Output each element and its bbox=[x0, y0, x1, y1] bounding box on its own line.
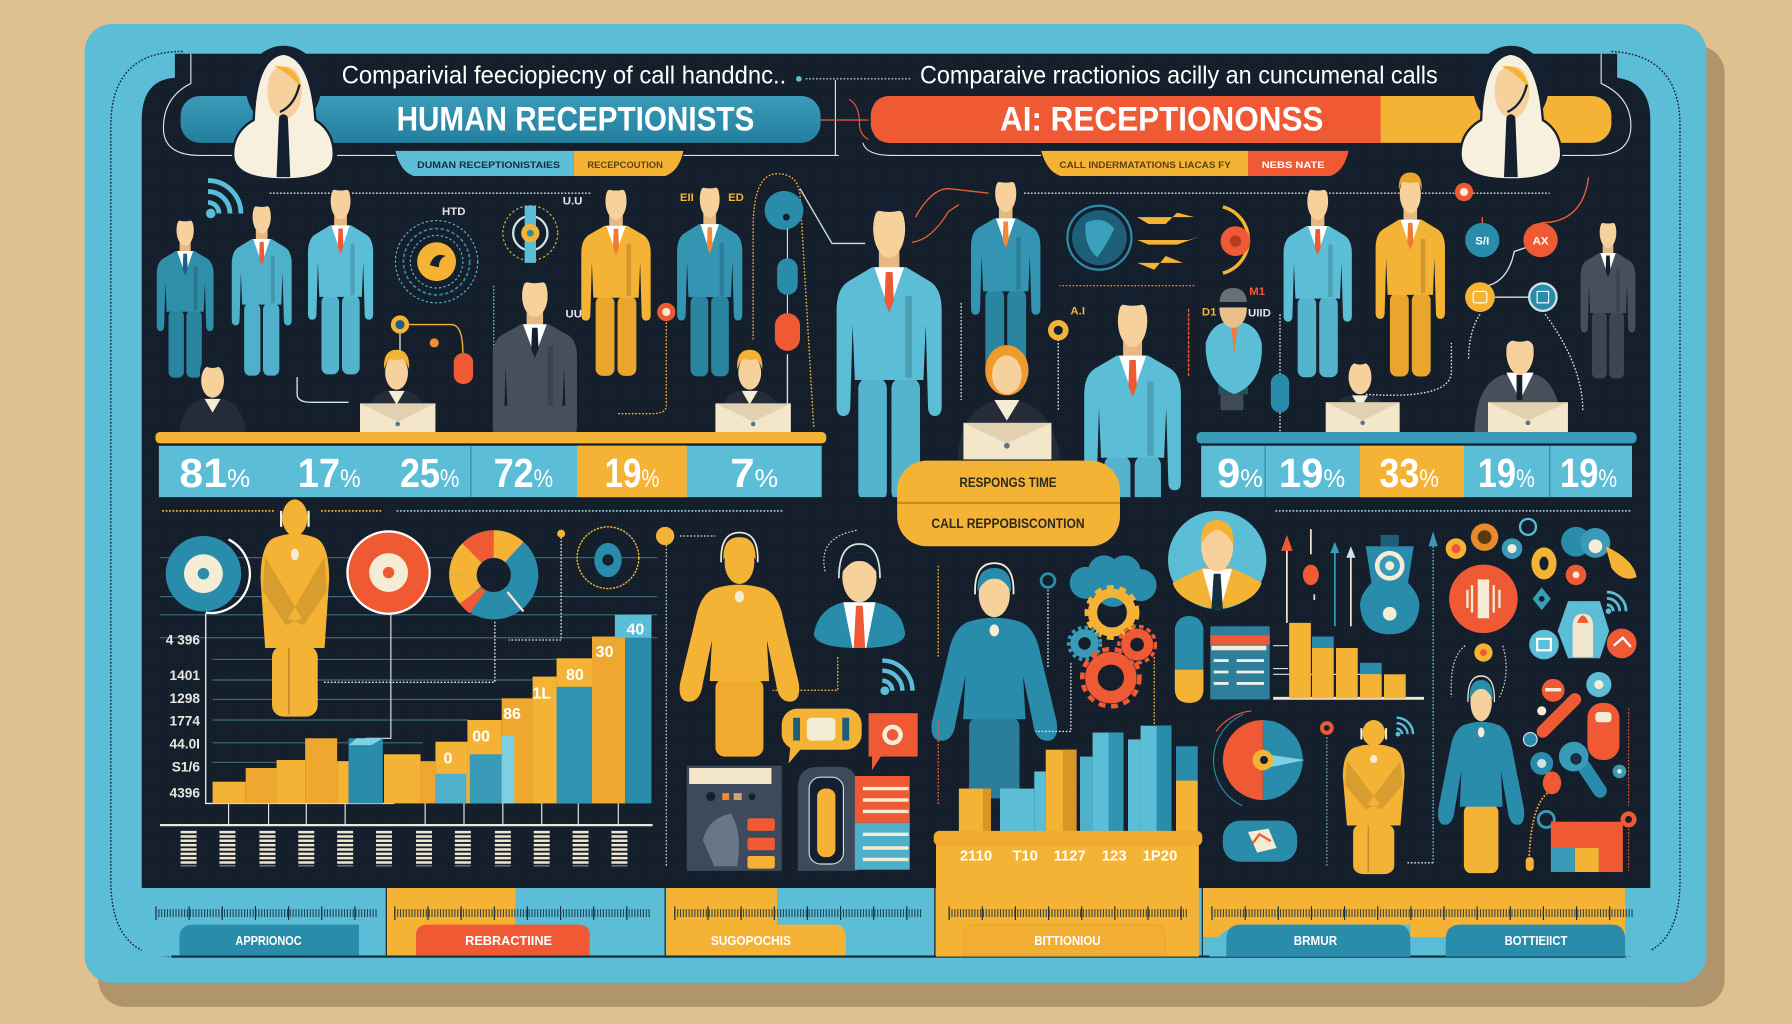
chart: staircase bar chart: 40 bbox=[627, 621, 644, 638]
figure: blue robe center bbox=[931, 563, 1057, 798]
chart: staircase bar chart: 80 bbox=[566, 667, 584, 684]
yellow box with year labels: 2110 bbox=[960, 849, 992, 865]
icon cluster bottom right bbox=[1523, 672, 1637, 871]
yellow box with year labels: T10 bbox=[1012, 849, 1038, 865]
stats row right: 9% bbox=[1217, 450, 1263, 496]
chart grid lines bbox=[160, 558, 657, 762]
bar chart on yellow box bbox=[959, 726, 1198, 832]
device: capsule bbox=[798, 767, 857, 871]
big red sound circle bbox=[1449, 565, 1518, 633]
stats row right bbox=[1201, 446, 1632, 497]
chart: staircase bar chart: 00 bbox=[472, 729, 490, 746]
dotted guides near gears bbox=[938, 566, 1154, 806]
avatar: right headset woman bbox=[1461, 46, 1561, 179]
nodes right: AX bbox=[1533, 236, 1549, 248]
chart x-axis labels striped bbox=[189, 831, 619, 866]
person: seated with laptop 2 bbox=[715, 350, 791, 433]
icon cluster top right bbox=[1446, 519, 1637, 610]
stats row left: 19% bbox=[605, 450, 659, 496]
robot teal icon bbox=[1360, 535, 1419, 634]
color block legend bbox=[1551, 822, 1623, 872]
data table bbox=[1210, 626, 1270, 699]
small labels center: M1 bbox=[1249, 286, 1266, 298]
small labels top left bbox=[442, 192, 744, 321]
header connector bbox=[821, 99, 869, 139]
sub label: ai: CALL INDERMATATIONS LIACAS FY bbox=[1059, 160, 1231, 170]
pill gauge bbox=[1175, 616, 1203, 703]
chart baseline and ticks bbox=[160, 803, 653, 825]
small labels top left: UU bbox=[565, 309, 582, 321]
person: light blue suit center right bbox=[1084, 292, 1181, 498]
chart: staircase bar chart: 1L bbox=[532, 685, 551, 702]
counter right bbox=[1197, 432, 1637, 443]
stair block chart bbox=[1273, 623, 1424, 698]
gears cluster bbox=[1069, 555, 1157, 706]
network lines top left bbox=[270, 174, 865, 427]
network lines center right bbox=[912, 177, 1589, 434]
person: seated left with laptop bbox=[360, 350, 435, 433]
red ring top right bbox=[1455, 183, 1473, 201]
red ring with line bbox=[1320, 721, 1334, 866]
small labels top left: ED bbox=[728, 192, 744, 204]
yellow box with year labels: 1127 bbox=[1054, 849, 1086, 865]
bottom tabs: REBRACTIINE bbox=[465, 934, 552, 948]
center callout card bbox=[897, 461, 1120, 546]
chart axis labels bbox=[166, 633, 200, 801]
figure: yellow folded arms bbox=[261, 499, 329, 717]
stats row left: 81% bbox=[179, 450, 250, 496]
dark main panel bbox=[142, 54, 1650, 888]
header outline brackets bbox=[163, 54, 1631, 155]
bottom tabs: BITTIONIOU bbox=[1034, 934, 1101, 948]
person: seated left bbox=[178, 358, 247, 440]
counter left bbox=[155, 432, 826, 443]
bottom tabs: SUGOPOCHIS bbox=[711, 934, 791, 948]
small labels top left: EII bbox=[680, 192, 694, 204]
target icon: teal bbox=[166, 536, 250, 613]
dotted riser right bbox=[1406, 531, 1438, 863]
stats row right: 19% bbox=[1478, 450, 1535, 496]
header bar: ai receptionists bbox=[871, 96, 1611, 143]
arrows rising bbox=[1281, 529, 1355, 626]
stats row right: 33% bbox=[1379, 450, 1439, 496]
chart axis labels: S1/6 bbox=[172, 759, 200, 774]
person: headset center with laptop bbox=[958, 345, 1061, 459]
person: yellow suit bbox=[581, 181, 651, 376]
small labels top left: U.U bbox=[563, 196, 582, 208]
node: ring and pill center bbox=[1048, 320, 1289, 413]
person: teal suit 5 bbox=[677, 178, 742, 376]
stats row right: 19% bbox=[1560, 450, 1617, 496]
hexagon badge group bbox=[1529, 601, 1637, 659]
chart: staircase bar chart: 86 bbox=[503, 706, 521, 723]
sub label: human: RECEPCOUTION bbox=[587, 160, 663, 170]
teal pill icon bbox=[1223, 821, 1297, 862]
bottom tabs: BRMUR bbox=[1294, 934, 1337, 948]
stats row left: 17% bbox=[298, 450, 361, 496]
portrait: headset bust bbox=[814, 530, 905, 648]
avatar: left headset woman bbox=[233, 46, 334, 179]
person: light blue suit right bbox=[1284, 181, 1352, 377]
small labels center: A.I bbox=[1070, 305, 1085, 317]
flag striped blocks bbox=[855, 776, 910, 870]
person: suited with laptop right bbox=[1474, 328, 1568, 432]
donut chart bbox=[463, 544, 525, 611]
chart axis labels: 44.0I bbox=[170, 737, 200, 752]
yellow box with year labels bbox=[934, 831, 1202, 957]
figure: small yellow folded bbox=[1343, 720, 1405, 874]
chart: staircase bar chart: 30 bbox=[596, 644, 614, 661]
bulb above blue figure bbox=[1451, 643, 1506, 697]
header bar: human receptionists: HUMAN RECEPTIONISTS bbox=[397, 100, 754, 138]
small labels top left: HTD bbox=[442, 206, 465, 218]
bottom tabs bbox=[179, 925, 1625, 957]
yellow box with year labels: 123 bbox=[1102, 849, 1127, 865]
bottom tabs: APPRIONOC bbox=[235, 934, 302, 948]
person: yellow suit right bbox=[1376, 172, 1445, 376]
person: teal suit 2 bbox=[232, 198, 292, 376]
stats row left: 25% bbox=[400, 450, 459, 496]
stats row left: 7% bbox=[730, 450, 778, 496]
chart axis labels: 1298 bbox=[170, 691, 200, 706]
nodes right bbox=[1465, 223, 1558, 312]
sub label: ai: NEBS NATE bbox=[1262, 160, 1325, 170]
icon: target stand bbox=[503, 206, 558, 263]
bottom tabs: BOTTIEIICT bbox=[1505, 934, 1568, 948]
device: control panel bbox=[687, 766, 782, 871]
sub label: human: DUMAN RECEPTIONISTAIES bbox=[417, 160, 560, 170]
bottom strip bbox=[142, 888, 1650, 958]
figure: blue robe right bbox=[1438, 676, 1524, 873]
chart: staircase bar chart bbox=[206, 537, 651, 803]
figure: yellow spread arms bbox=[680, 533, 799, 757]
person: large light blue suit bbox=[837, 196, 942, 502]
chart: staircase bar chart: 0 bbox=[444, 750, 453, 767]
small labels center: UIID bbox=[1248, 308, 1271, 320]
chart axis labels: 1401 bbox=[170, 668, 200, 683]
pulse line bbox=[155, 910, 1634, 917]
icon: dial globe bbox=[577, 527, 639, 589]
connector between subtitles bbox=[796, 76, 911, 82]
title: left subtitle: Comparivial feeciopiecny of call handdnc.. bbox=[342, 61, 786, 89]
chart axis labels: 4 396 bbox=[166, 633, 200, 648]
stats row left bbox=[159, 446, 822, 497]
chart axis labels: 1774 bbox=[170, 714, 200, 729]
person: teal suit center bbox=[971, 173, 1040, 371]
title: right subtitle: Comparaive rractionios acilly an cuncumenal calls bbox=[920, 61, 1438, 89]
stats row right: 19% bbox=[1279, 450, 1345, 496]
person: teal suit 1 bbox=[157, 213, 214, 378]
divider dotted lines mid bbox=[162, 510, 1632, 512]
yellow box with year labels: 1P20 bbox=[1143, 849, 1177, 865]
lower pie chart bbox=[1214, 711, 1305, 806]
person: light blue suit 3 bbox=[308, 181, 373, 374]
target icon: red bbox=[347, 531, 430, 614]
icon: wifi center bbox=[880, 661, 912, 695]
icon: small wifi bbox=[1396, 718, 1413, 737]
small labels center bbox=[1070, 286, 1271, 320]
portrait circle: blond man bbox=[1168, 511, 1266, 609]
header bar: human receptionists bbox=[181, 96, 821, 143]
center callout card: RESPONGS TIME bbox=[959, 475, 1057, 490]
icon: globe with arrows bbox=[1067, 206, 1250, 273]
nodes right: S/I bbox=[1475, 236, 1489, 248]
small labels center: D1 bbox=[1202, 306, 1217, 318]
icon: wifi left bbox=[206, 181, 241, 218]
sub label: ai bbox=[1041, 151, 1349, 176]
header bar: ai receptionists: AI: RECEPTIONONSS bbox=[1000, 100, 1323, 138]
dotted frame border bbox=[111, 51, 1680, 957]
lollipop nodes and dotted riser bbox=[557, 527, 715, 866]
center callout card: CALL REPPOBISCONTION bbox=[931, 516, 1085, 531]
chart axis labels: 4396 bbox=[170, 786, 200, 801]
speech bubble red bbox=[869, 713, 918, 770]
sub label: human bbox=[395, 151, 683, 176]
stats row left: 72% bbox=[494, 450, 553, 496]
dotted bracket near figure bbox=[773, 657, 838, 690]
node icons left bbox=[391, 191, 803, 384]
icon: spiral coin bbox=[395, 221, 478, 303]
icon: wifi cluster bbox=[1606, 592, 1626, 614]
speech bubble yellow bbox=[782, 709, 862, 763]
person: gray suit right bbox=[1581, 215, 1635, 378]
person: bust on stand bbox=[1206, 288, 1262, 410]
person: seated right bbox=[1326, 354, 1400, 437]
person: gray suit bbox=[492, 275, 577, 432]
